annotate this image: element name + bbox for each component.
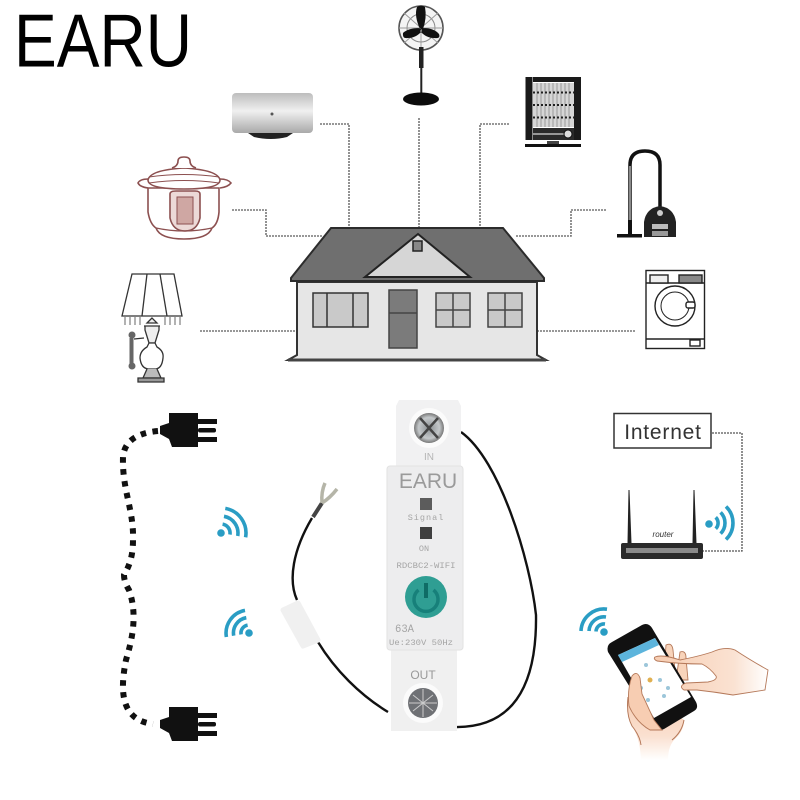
dotted cable: [123, 431, 158, 724]
icon: table lamp: [122, 274, 182, 382]
right windows: [436, 293, 522, 327]
dashed link from internet to router: [703, 433, 742, 551]
far-side fingers: [664, 644, 688, 680]
house: [288, 228, 546, 360]
icon: vacuum cleaner: [617, 151, 676, 238]
fork terminal: [313, 483, 337, 517]
icon: water boiler: [232, 93, 313, 139]
roof: [291, 228, 544, 281]
icon: bottom plug: [160, 707, 217, 741]
breaker labels: IN: [424, 452, 434, 463]
right wire: [455, 432, 536, 727]
WiFi circuit breaker: [387, 400, 463, 731]
WiFi circuit breaker: ON: [419, 544, 429, 554]
power cord with plugs: [123, 413, 217, 741]
wire clip: [283, 603, 318, 646]
left palm behind phone: [628, 680, 684, 760]
icon: wifi signal phone: [581, 609, 608, 636]
bottom terminal: [391, 650, 457, 731]
icon: wifi signal router: [705, 506, 733, 540]
WiFi circuit breaker: 63A: [395, 624, 414, 636]
breaker body: [387, 466, 463, 650]
icon: router: router: [653, 530, 674, 539]
icon: hands holding smartphone: [608, 624, 768, 760]
left window: [313, 293, 368, 327]
bottom screw: [403, 683, 443, 723]
icon: washing machine: [646, 270, 705, 348]
icon: wifi signal middle left: [226, 610, 253, 637]
top terminal: [396, 400, 461, 466]
internet box: Internet: [624, 421, 702, 444]
icon: heater: [525, 77, 581, 147]
phone: [608, 624, 697, 730]
icon: router: [621, 490, 703, 559]
left thumb: [628, 673, 662, 730]
right hand: [654, 648, 768, 695]
breaker wires: [293, 432, 536, 727]
icon: wifi signal top left: [217, 508, 246, 537]
internet box: [614, 414, 711, 448]
power button: [405, 576, 447, 618]
WiFi circuit breaker: EARU: [399, 470, 457, 493]
icon: top plug: [160, 413, 217, 447]
WiFi circuit breaker: OUT: [410, 668, 436, 682]
gable: [365, 234, 470, 277]
title: EARU logo: EARU: [14, 0, 192, 82]
icon: standing fan: [399, 6, 443, 106]
WiFi circuit breaker: Signal: [408, 513, 444, 523]
icon: rice cooker: [138, 157, 231, 239]
top screw: [409, 408, 449, 448]
connector lines from appliances to house: [200, 118, 635, 331]
WiFi circuit breaker: RDCBC2-WIFI: [396, 561, 456, 571]
phone screen: [618, 638, 691, 718]
left wire: [293, 518, 388, 712]
house body: [288, 282, 546, 360]
door: [389, 290, 417, 348]
WiFi circuit breaker: Ue:230V 50Hz: [389, 639, 453, 648]
